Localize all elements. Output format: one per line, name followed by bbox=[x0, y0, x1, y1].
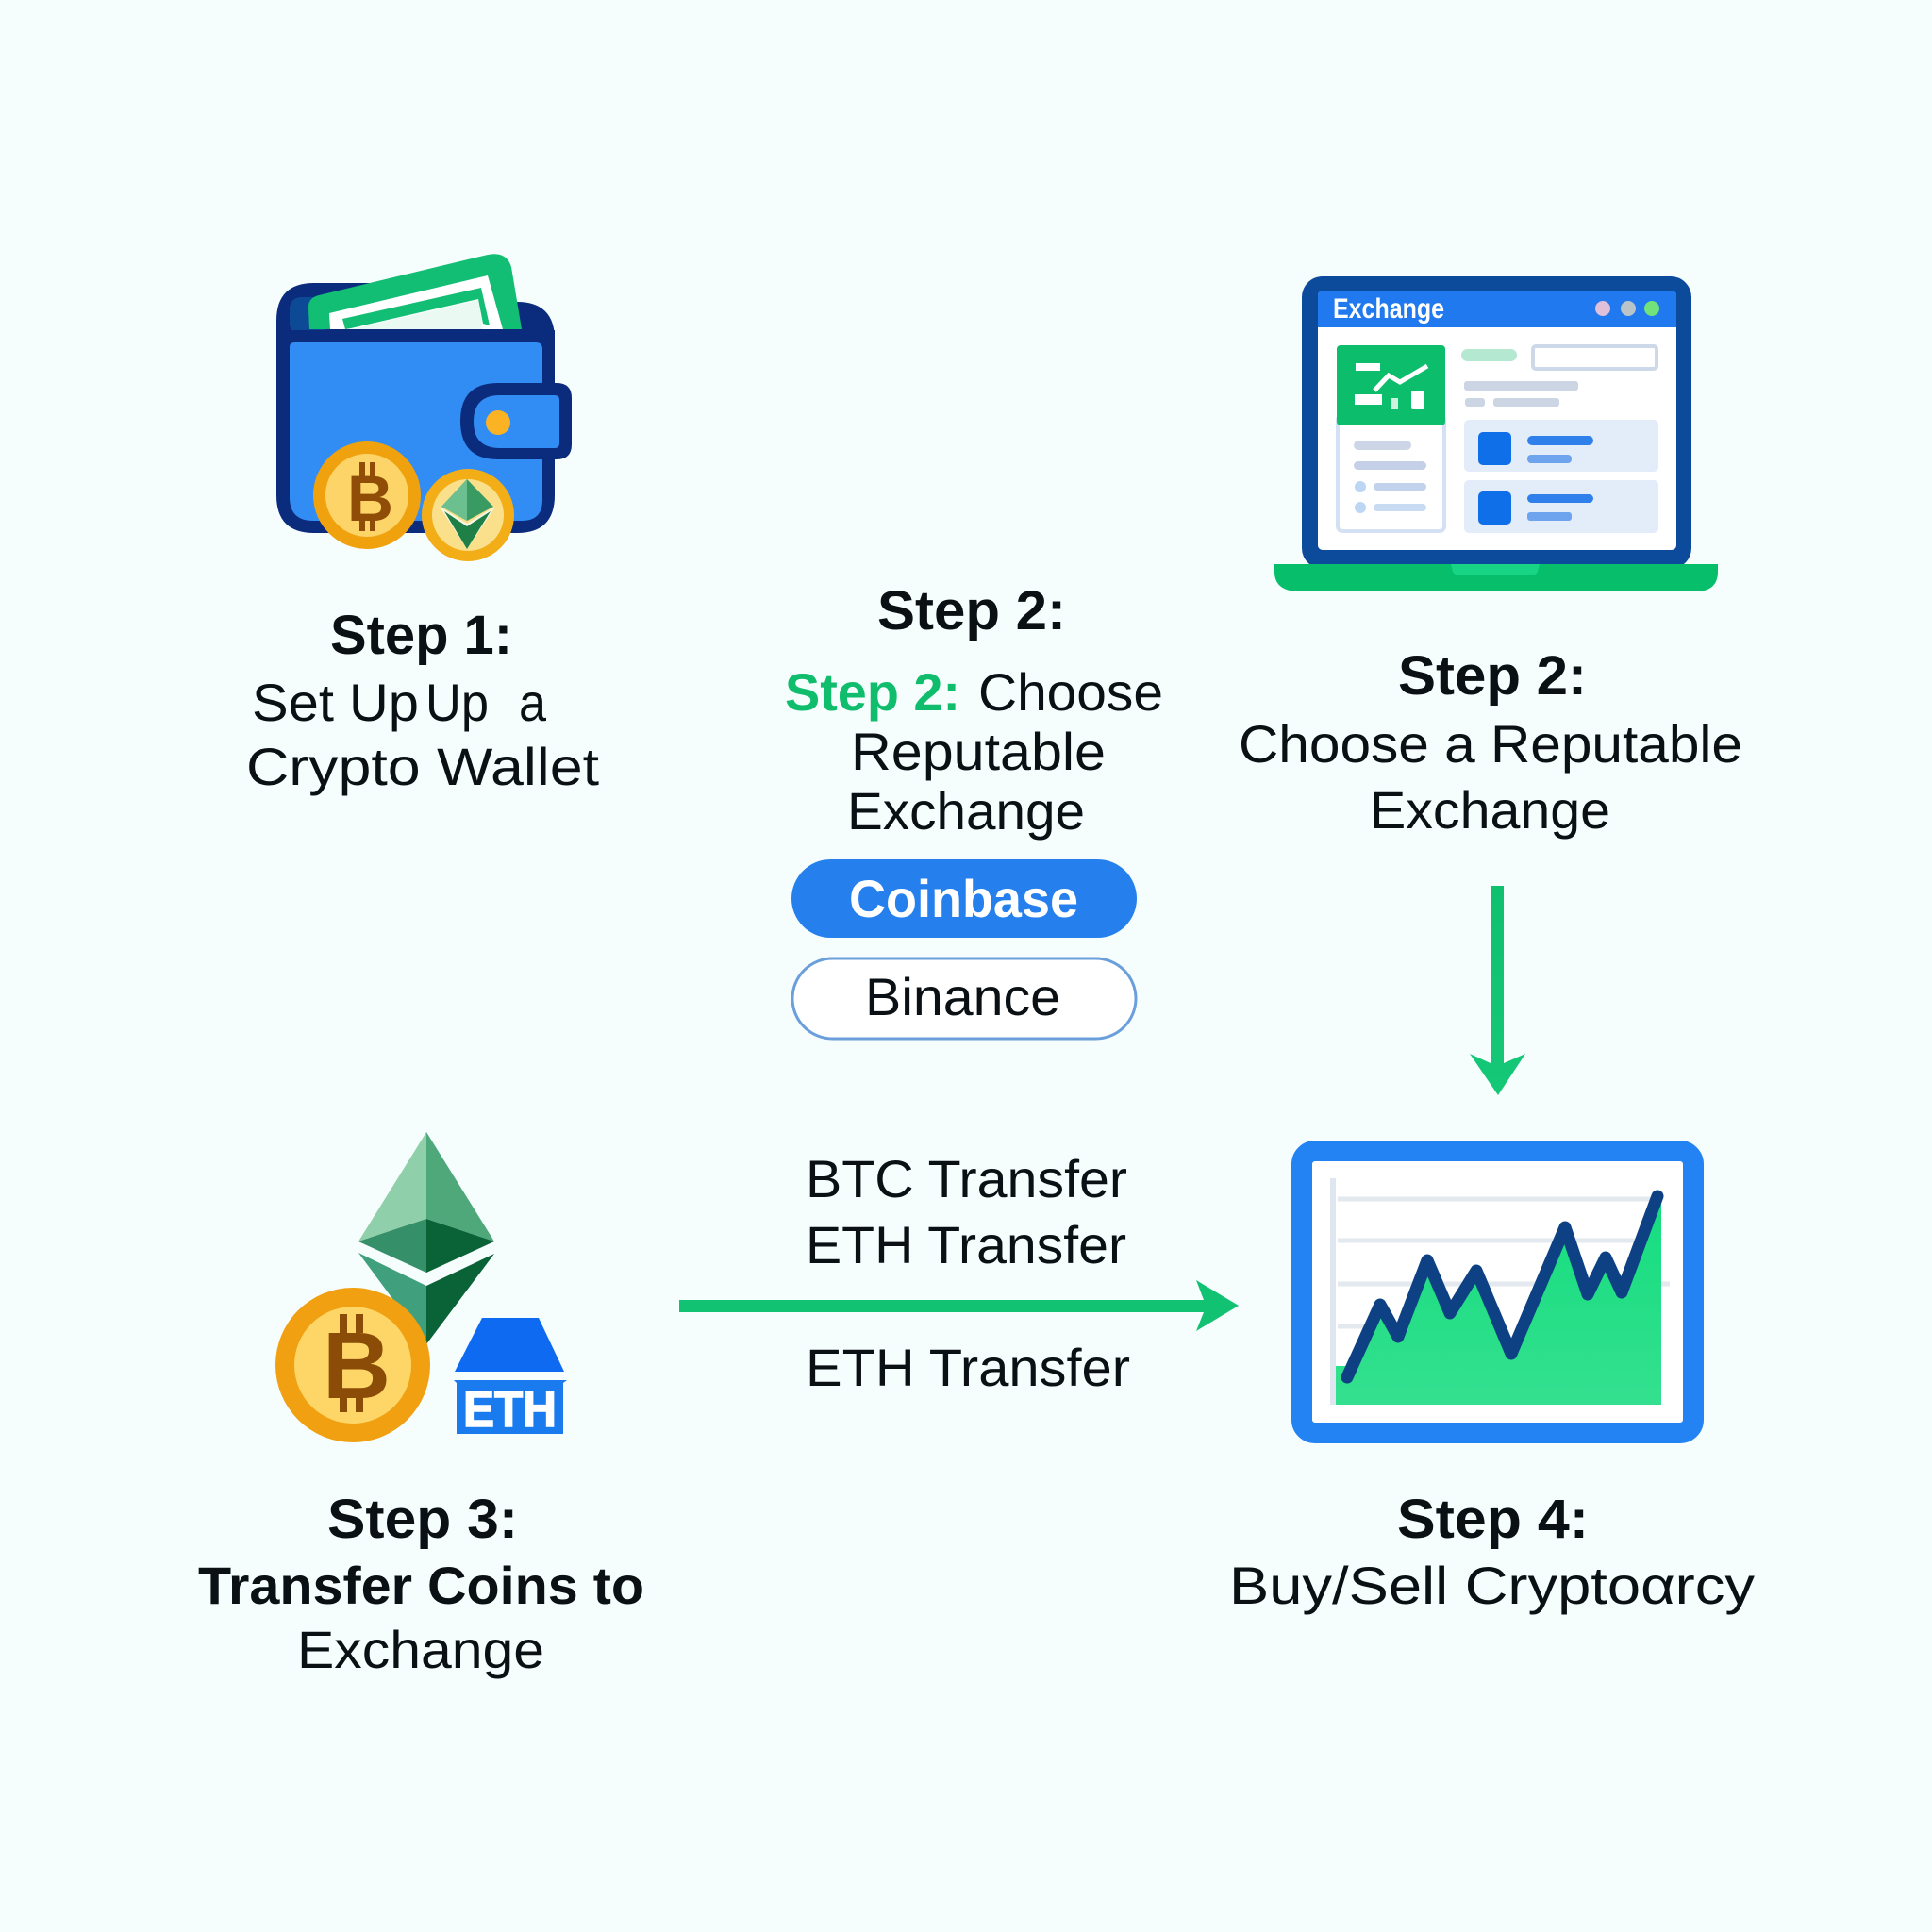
bitcoin coin: B bbox=[323, 1313, 391, 1419]
icon: crypto wallet bbox=[276, 254, 572, 561]
step 1 description: Crypto Wallet bbox=[246, 737, 599, 796]
transfer labels above arrow: BTC Transfer bbox=[806, 1149, 1127, 1208]
step 1 heading: Step 1: bbox=[330, 605, 512, 666]
button: Coinbase: Coinbase bbox=[849, 869, 1078, 928]
button: Binance: Binance bbox=[865, 967, 1060, 1026]
ETH store: ETH bbox=[463, 1381, 557, 1438]
chart line bbox=[1347, 1196, 1657, 1377]
step 2 centre description: Exchange bbox=[847, 781, 1085, 841]
right list bbox=[1461, 346, 1658, 533]
step 2 centre description: Choose bbox=[978, 662, 1163, 722]
step 1 description: a bbox=[519, 673, 547, 732]
chart area bbox=[1336, 1196, 1661, 1405]
transfer label below arrow: ETH Transfer bbox=[806, 1338, 1130, 1397]
step 3 description: Transfer Coins to bbox=[198, 1556, 644, 1615]
left card bbox=[1337, 345, 1445, 531]
step 2 right description bbox=[1239, 714, 1742, 840]
step 2 right description: Choose a Reputable bbox=[1239, 714, 1742, 774]
bitcoin coin bbox=[275, 1288, 430, 1442]
bitcoin coin: B bbox=[347, 462, 393, 535]
ETH store bbox=[454, 1318, 567, 1438]
ethereum coin bbox=[422, 469, 514, 561]
button: Coinbase bbox=[791, 859, 1137, 938]
transfer labels above arrow: ETH Transfer bbox=[806, 1215, 1126, 1274]
icon: ethereum, bitcoin and ETH store bbox=[275, 1132, 567, 1442]
step 1 description: Up bbox=[425, 673, 489, 732]
transfer labels above arrow bbox=[806, 1149, 1127, 1274]
step 3 description: Exchange bbox=[297, 1620, 544, 1679]
step 2 right description: Exchange bbox=[1370, 780, 1610, 840]
arrow: transfer to chart bbox=[679, 1280, 1239, 1331]
step 1 description bbox=[246, 673, 599, 796]
step 4 description: Buy/Sell Cryptoαrcy bbox=[1229, 1556, 1755, 1615]
wallet clasp bbox=[460, 383, 572, 459]
step 2 centre description: Step 2: bbox=[785, 662, 960, 722]
arrow: exchange down to chart bbox=[1470, 886, 1525, 1095]
window dots bbox=[1595, 301, 1659, 316]
step 2 right heading: Step 2: bbox=[1398, 645, 1587, 707]
step 4 heading: Step 4: bbox=[1397, 1489, 1589, 1550]
icon: price chart bbox=[1302, 1151, 1693, 1433]
step 3 description bbox=[198, 1556, 644, 1679]
step 2 centre description: Reputable bbox=[851, 722, 1106, 781]
step 2 centre description bbox=[785, 662, 1163, 841]
button: Binance bbox=[792, 958, 1136, 1039]
exchange label: Exchange bbox=[1333, 293, 1444, 325]
icon: exchange laptop bbox=[1274, 276, 1718, 591]
bitcoin coin bbox=[313, 441, 421, 549]
step 1 description: Set Up bbox=[252, 673, 419, 732]
step 3 heading: Step 3: bbox=[327, 1489, 518, 1550]
ethereum diamond bbox=[358, 1132, 494, 1344]
step 2 centre heading: Step 2: bbox=[877, 580, 1066, 641]
